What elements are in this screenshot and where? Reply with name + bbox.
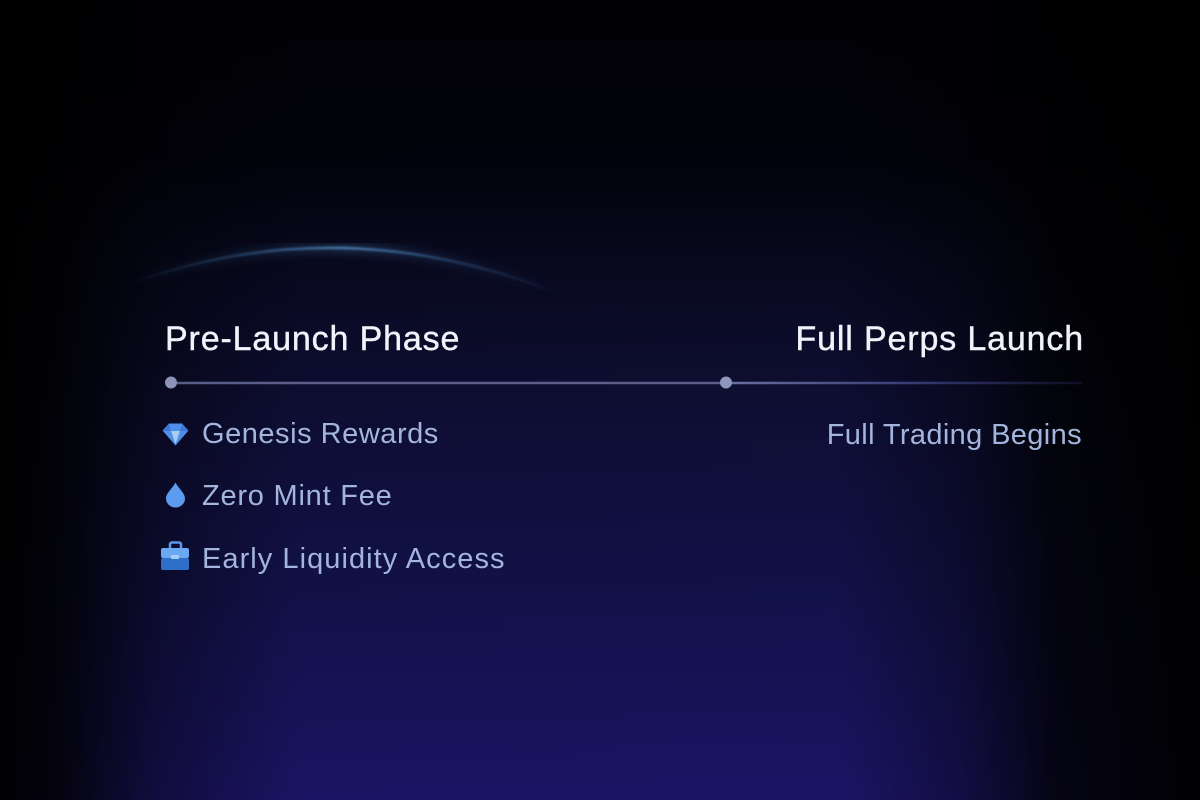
- icon: water drop: [166, 482, 185, 508]
- label: Genesis Rewards: Genesis Rewards: [202, 418, 439, 450]
- icon: briefcase: [161, 541, 189, 570]
- heading: Full Perps Launch: Full Perps Launch: [796, 320, 1084, 358]
- label: Zero Mint Fee: Zero Mint Fee: [202, 480, 393, 512]
- label: Early Liquidity Access: Early Liquidity Access: [202, 543, 506, 575]
- label: Full Trading Begins: Full Trading Begins: [827, 419, 1082, 451]
- icon: diamond: [162, 424, 188, 446]
- heading: Pre-Launch Phase: Pre-Launch Phase: [165, 320, 460, 358]
